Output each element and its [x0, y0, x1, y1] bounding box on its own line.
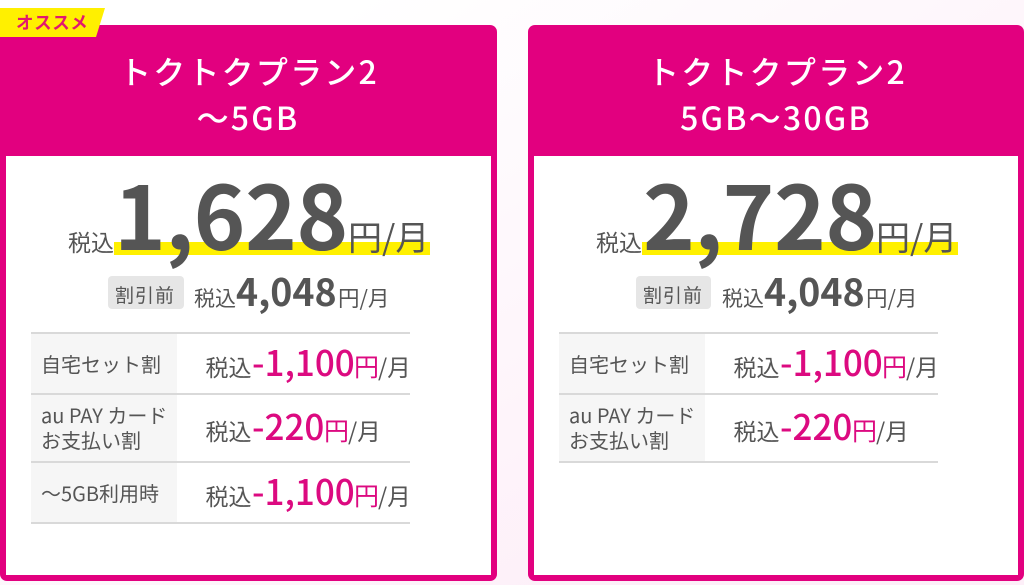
row: up to 5GB discount: ～5GB利用時: [41, 478, 159, 507]
row: au PAY card discount: -220: [252, 400, 324, 451]
card body: [6, 156, 491, 575]
discount table: [31, 332, 411, 524]
original price: 割引前: [643, 281, 703, 308]
row: au PAY card discount: 円: [324, 412, 349, 448]
row: au PAY card discount: 税込: [734, 413, 780, 447]
row: home set discount: -1,100: [252, 336, 355, 387]
row: au PAY card discount: 円: [852, 412, 877, 448]
main price: 円/月: [876, 211, 957, 260]
original price: [108, 262, 389, 317]
main price: 2,728: [643, 149, 877, 276]
original price: 4,048: [236, 262, 337, 317]
row: au PAY card discount: au PAY カード: [569, 400, 695, 429]
price highlight: [114, 242, 430, 255]
row: au PAY card discount: [569, 400, 909, 454]
row: home set discount: /月: [906, 349, 939, 383]
discount table: [559, 332, 939, 463]
original price: [636, 262, 917, 317]
row: au PAY card discount: au PAY カード: [41, 400, 167, 429]
badge: recommended: [0, 8, 105, 37]
panel: right plan card: [528, 25, 1024, 581]
badge: recommended: オススメ: [16, 10, 88, 35]
main price: [596, 149, 957, 276]
row: home set discount: 税込: [734, 349, 780, 383]
row: au PAY card discount: /月: [876, 413, 909, 447]
row: up to 5GB discount: -1,100: [252, 465, 355, 516]
heading: left plan: [119, 48, 379, 140]
heading: left plan: トクトクプラン2: [119, 48, 379, 94]
row: au PAY card discount: [41, 400, 381, 454]
original price: 税込: [194, 283, 236, 313]
original price: 税込: [722, 283, 764, 313]
card frame: [0, 25, 497, 581]
original price: 4,048: [764, 262, 865, 317]
main price: 1,628: [114, 149, 348, 276]
main price: 税込: [68, 224, 114, 258]
main price: 円/月: [348, 211, 429, 260]
row: home set discount: /月: [378, 349, 411, 383]
heading: right plan: 5GB～30GB: [680, 94, 872, 140]
row: au PAY card discount: お支払い割: [569, 425, 669, 454]
row: home set discount: 自宅セット割: [569, 349, 689, 378]
row: home set discount: 自宅セット割: [41, 349, 161, 378]
row: home set discount: [569, 336, 939, 387]
card frame: [528, 25, 1024, 581]
original price: 円/月: [338, 282, 389, 313]
row: au PAY card discount: -220: [780, 400, 852, 451]
price highlight: [642, 242, 958, 255]
original price: 円/月: [866, 282, 917, 313]
row: up to 5GB discount: 税込: [206, 478, 252, 512]
row: home set discount: 円: [354, 348, 379, 384]
heading: right plan: [647, 48, 907, 140]
row: au PAY card discount: 税込: [206, 413, 252, 447]
row: au PAY card discount: お支払い割: [41, 425, 141, 454]
main price: [68, 149, 429, 276]
row: home set discount: [41, 336, 411, 387]
original price: 割引前: [115, 281, 175, 308]
row: home set discount: 税込: [206, 349, 252, 383]
card body: [534, 156, 1018, 575]
row: up to 5GB discount: 円: [354, 477, 379, 513]
row: home set discount: -1,100: [780, 336, 883, 387]
row: up to 5GB discount: /月: [378, 478, 411, 512]
row: home set discount: 円: [882, 348, 907, 384]
row: au PAY card discount: /月: [348, 413, 381, 447]
heading: left plan: ～5GB: [197, 94, 299, 140]
panel: left plan card: [0, 8, 497, 581]
main price: 税込: [596, 224, 642, 258]
row: up to 5GB discount: [41, 465, 411, 516]
heading: right plan: トクトクプラン2: [647, 48, 907, 94]
